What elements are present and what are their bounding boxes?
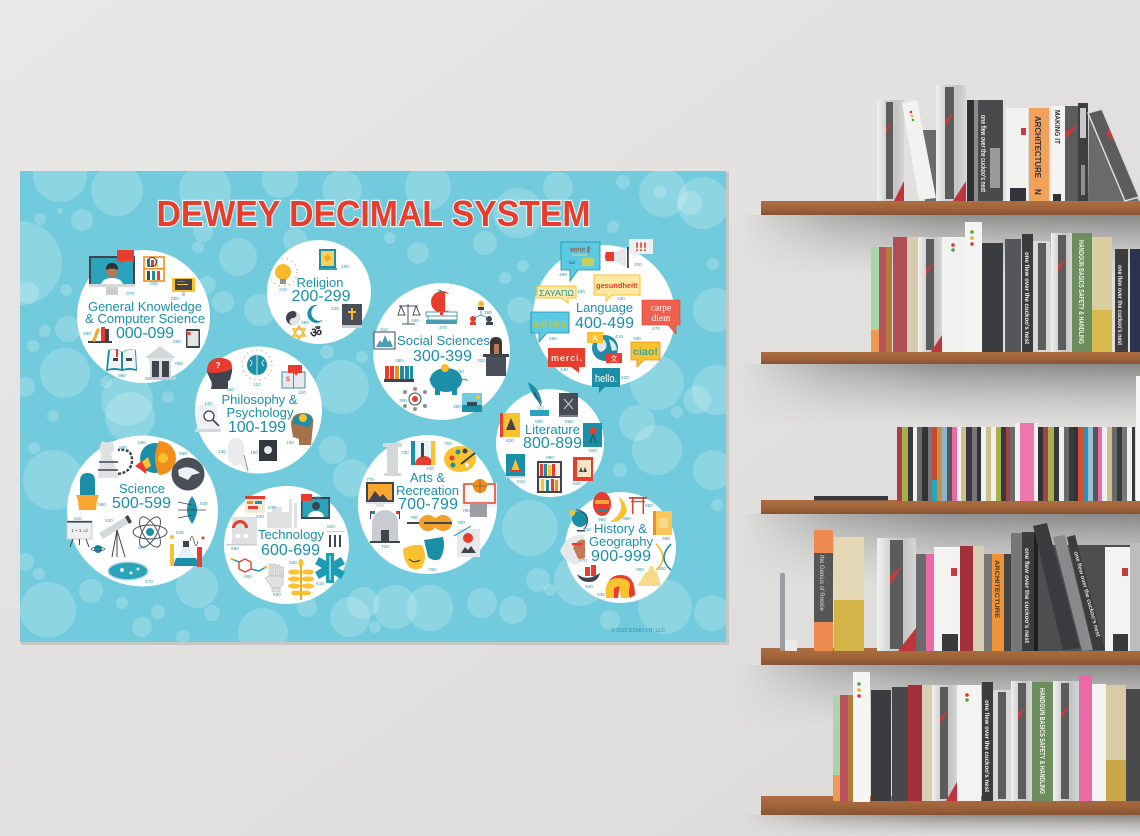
icon: pyramid — [637, 566, 661, 586]
heading: Literature: Literature — [525, 422, 580, 437]
label 450: 450 — [633, 336, 641, 341]
heading: Recreation: Recreation — [396, 483, 459, 498]
circle: Religion — [267, 240, 371, 344]
title: DEWEY DECIMAL SYSTEM — [156, 193, 590, 234]
icon: star of David — [293, 326, 305, 339]
book — [918, 237, 942, 352]
book — [957, 685, 981, 801]
bubble: adios — [531, 312, 569, 342]
label 770: 770 — [366, 477, 374, 482]
label 680: 680 — [231, 546, 239, 551]
book — [1051, 233, 1072, 352]
book — [1065, 106, 1078, 201]
icon: landscape photo — [462, 393, 482, 412]
bubble: carpe diem: carpe — [651, 304, 671, 314]
label 330: 330 — [456, 369, 464, 374]
label 430: 430 — [617, 296, 625, 301]
label 920: 920 — [658, 566, 666, 571]
book — [1053, 681, 1079, 801]
book: Handgun Basics — [1072, 233, 1092, 352]
bubble: adios: adiós — [533, 318, 567, 330]
label 640: 640 — [256, 514, 264, 519]
icon: red book — [573, 457, 593, 481]
circle: Language — [531, 239, 680, 393]
tilted book: cuckoo: one flew over the cuckoo's nest — [1072, 551, 1101, 638]
icon: light bulb — [269, 258, 297, 286]
icon: DNA helix — [656, 544, 671, 570]
label 500: 500 — [138, 545, 146, 550]
label 200: 200 — [341, 264, 349, 269]
book — [1006, 108, 1028, 201]
book: Architecture — [1029, 108, 1049, 201]
icon: yellow book — [500, 413, 520, 437]
label 300: 300 — [399, 398, 407, 403]
shelf 5 with books — [761, 672, 1140, 815]
book — [993, 690, 1011, 801]
book tilted — [1088, 109, 1139, 201]
range 900-999: 900-999 — [591, 548, 651, 565]
icon: library building — [145, 346, 176, 380]
label 390: 390 — [395, 358, 403, 363]
book: Architecture: ARCHITECTURE — [993, 560, 1000, 619]
label 900: 900 — [662, 536, 670, 541]
icon: om symbol: ॐ — [310, 325, 322, 340]
icon: ghost — [228, 438, 248, 471]
bubble: merci — [548, 348, 585, 373]
bubble: ciao — [631, 342, 660, 367]
icon: open book — [106, 349, 137, 371]
book: one flew over the cuckoo's nest: one flew over the cuckoo's nest — [979, 115, 986, 192]
book — [932, 685, 957, 801]
tilted book: cuckoo — [1067, 535, 1105, 650]
label 150: 150 — [226, 387, 234, 392]
bubble: merci: merci. — [551, 353, 582, 363]
book: Architecture: N — [1033, 189, 1042, 195]
bubble: gesundheit: gesundheit! — [596, 283, 638, 290]
tilted book — [1033, 523, 1080, 650]
bubble: ciao: ciao! — [633, 347, 658, 358]
icon: balloon picture — [454, 526, 480, 557]
label 320: 320 — [477, 358, 485, 363]
book: cuckoo: one flew over the cuckoo's nest — [1023, 252, 1030, 345]
book: Handgun Basics: HANDGUN BASICS SAFETY & HANDLING — [1077, 240, 1084, 344]
icon: people network — [470, 301, 493, 325]
icon: headdress — [560, 535, 585, 565]
label 600: 600 — [273, 592, 281, 597]
label 070: 070 — [126, 291, 134, 296]
label 350: 350 — [453, 404, 461, 409]
icon: medical star — [315, 553, 345, 583]
book — [877, 100, 904, 201]
range 600-699: 600-699 — [261, 542, 320, 559]
label 890: 890 — [546, 455, 554, 460]
label 830: 830 — [573, 481, 581, 486]
label 750: 750 — [444, 441, 452, 446]
icon: head with bulb — [291, 413, 313, 445]
icon: Bible — [342, 304, 362, 328]
label 840: 840 — [589, 448, 597, 453]
icon: fossil — [172, 458, 204, 490]
book: cuckoo: one flew over the cuckoo's nest — [983, 700, 990, 793]
icon: earth cross-section — [135, 441, 176, 475]
copyright: © 2022 ECHO-LIT, LLC — [611, 627, 665, 634]
icon: chalkboard — [67, 521, 92, 547]
icon: monitor engineer — [301, 494, 330, 519]
icon: dark book — [559, 393, 578, 417]
label 510: 510 — [74, 516, 82, 521]
icon: golden book — [653, 511, 672, 535]
label 970: 970 — [579, 558, 587, 563]
icon: quill and ink — [528, 382, 549, 416]
label 140: 140 — [204, 401, 212, 406]
label 950: 950 — [645, 503, 653, 508]
icon: wheat — [288, 559, 314, 600]
range 500-599: 500-599 — [112, 495, 171, 512]
shelf 2 with books — [761, 222, 1140, 364]
label 650: 650 — [314, 495, 322, 500]
icon: teal book — [319, 249, 337, 270]
icon: chalkboard: 1 + 1 =2 — [71, 528, 88, 533]
book — [902, 100, 936, 200]
heading: Social Sciences: Social Sciences — [397, 333, 490, 348]
label 860: 860 — [565, 419, 573, 424]
label 570: 570 — [145, 579, 153, 584]
label 220: 220 — [331, 306, 339, 311]
book: cuckoo: one flew over the cuckoo's nest — [1116, 265, 1123, 346]
icon: bars — [384, 366, 414, 382]
circle: General Knowledge & Computer Science — [77, 250, 210, 383]
icon: column — [383, 443, 402, 476]
heading: Language: Language — [576, 300, 633, 315]
icon: planet — [91, 545, 105, 553]
shelf shadows — [740, 215, 1140, 836]
icon: globe with language tags: 文 — [610, 354, 618, 363]
icon: apple on books — [426, 290, 457, 324]
bubble: hello: hello. — [595, 373, 617, 385]
label 000: 000 — [171, 296, 179, 301]
icon: Viking ship — [577, 565, 600, 582]
label 580: 580 — [98, 502, 106, 507]
icon: megaphone — [605, 247, 629, 268]
label 610: 610 — [316, 581, 324, 586]
heading: Religion: Religion — [296, 275, 344, 290]
label 930: 930 — [597, 592, 605, 597]
icon: crescent moon — [307, 305, 323, 323]
heading: Arts &: Arts & — [410, 470, 445, 485]
label 590: 590 — [119, 445, 127, 450]
icon: molecule — [230, 558, 268, 572]
icon: bookcase — [537, 461, 562, 493]
book: cuckoo — [1115, 249, 1128, 352]
bubble: greetings — [561, 242, 600, 281]
label 370: 370 — [439, 325, 447, 330]
label 720: 720 — [381, 544, 389, 549]
icon: lab flask — [170, 535, 204, 567]
book: one flew over the cuckoo's nest — [967, 100, 1003, 201]
icon: chart frame — [374, 332, 395, 349]
tilted book — [1053, 535, 1093, 651]
circle: Social Sciences — [373, 283, 510, 420]
icon: scales — [398, 304, 420, 324]
heading: Technology: Technology — [258, 527, 324, 542]
icon: brain — [242, 350, 272, 380]
book — [1011, 681, 1032, 801]
book — [853, 672, 870, 802]
icon: monitor landscape — [366, 482, 394, 507]
label 460: 460 — [549, 336, 557, 341]
range 800-899: 800-899 — [523, 435, 582, 452]
icon: desk globe — [569, 510, 588, 532]
icon: globe with language tags: A — [592, 334, 598, 343]
range 700-799: 700-799 — [398, 496, 458, 513]
label 790: 790 — [462, 508, 470, 513]
bubble: exclamation: !!! — [635, 240, 647, 254]
label 780: 780 — [410, 515, 418, 520]
label 810: 810 — [517, 479, 525, 484]
label 910: 910 — [583, 527, 591, 532]
icon: arch building — [370, 510, 400, 543]
icon: document with magnifier — [195, 405, 221, 432]
range 300-399: 300-399 — [413, 348, 472, 365]
circle: Philosophy & Psychology — [195, 346, 322, 474]
label 520: 520 — [105, 518, 113, 523]
label 960: 960 — [598, 517, 606, 522]
label 050: 050 — [173, 339, 181, 344]
heading: Philosophy &: Philosophy & — [222, 392, 298, 407]
icon: theatre masks — [403, 537, 444, 570]
shelf 4 with books — [761, 523, 1140, 665]
icon: teal book with candle — [506, 454, 525, 478]
label 490: 490 — [559, 272, 567, 277]
label 800: 800 — [535, 419, 543, 424]
range 200-299: 200-299 — [292, 288, 351, 305]
icon: globe with language tags — [587, 332, 622, 363]
icon: bookshelf magnifier — [144, 257, 164, 281]
icon: speaker at podium — [483, 337, 509, 376]
icon: telescope — [99, 515, 132, 557]
icon: blueprint building — [226, 517, 257, 546]
book — [877, 538, 916, 651]
label 420: 420 — [621, 375, 629, 380]
icon: Spartan helmet — [606, 575, 635, 598]
range 400-499: 400-499 — [575, 315, 634, 332]
label 530: 530 — [200, 501, 208, 506]
label 110: 110 — [253, 382, 261, 387]
book: Making It — [1051, 106, 1065, 201]
icon: lemur — [98, 441, 132, 478]
icon: person network — [403, 387, 427, 411]
book: Making It: MAKING IT — [1053, 110, 1060, 145]
label 020: 020 — [150, 281, 158, 286]
bubble: agape in Greek: ΣΑΥΑΠΩ — [539, 288, 574, 298]
label 550: 550 — [138, 440, 146, 445]
label 730: 730 — [401, 450, 409, 455]
circle: Literature — [496, 382, 604, 497]
label 630: 630 — [289, 560, 297, 565]
label 030: 030 — [83, 331, 91, 336]
book — [934, 547, 960, 651]
icon: robotic glove — [265, 564, 284, 592]
label 990: 990 — [623, 516, 631, 521]
label 100: 100 — [286, 440, 294, 445]
poster — [20, 171, 729, 645]
label 940: 940 — [585, 584, 593, 589]
heading: General Knowledge: General Knowledge — [88, 299, 202, 314]
icon: factory — [267, 499, 297, 528]
label 440: 440 — [560, 367, 568, 372]
heading: Psychology: Psychology — [226, 405, 294, 420]
label 480: 480 — [577, 289, 585, 294]
icon: tribal mask — [593, 492, 611, 516]
circle: Science — [67, 436, 218, 586]
label 660: 660 — [244, 574, 252, 579]
icon: dark book — [259, 440, 277, 461]
book — [1033, 241, 1050, 352]
label 290: 290 — [301, 320, 309, 325]
label 700: 700 — [428, 567, 436, 572]
label 560: 560 — [179, 451, 187, 456]
icon: piggy bank — [429, 364, 467, 395]
book — [936, 85, 966, 201]
bubble: exclamation — [629, 239, 653, 259]
label 340: 340 — [411, 318, 419, 323]
icon: mixer sliders — [327, 531, 345, 547]
label 210: 210 — [279, 287, 287, 292]
icon: open book with speech: S — [286, 377, 290, 383]
label 410: 410 — [615, 334, 623, 339]
label 180: 180 — [250, 450, 258, 455]
book: Architecture — [992, 554, 1004, 651]
icon: books with pencil — [88, 327, 112, 343]
range 100-199: 100-199 — [228, 419, 286, 436]
range 000-099: 000-099 — [116, 325, 174, 342]
icon: monitor person — [89, 250, 135, 295]
book: Architecture: ARCHITECTURE — [1033, 116, 1042, 179]
label 670: 670 — [268, 505, 276, 510]
book — [1078, 103, 1088, 201]
label 740: 740 — [426, 466, 434, 471]
bookend — [780, 573, 785, 651]
shelf 3 with thin books — [761, 376, 1140, 514]
icon: boomerang — [610, 497, 627, 522]
label 120: 120 — [298, 390, 306, 395]
heading: History &: History & — [594, 521, 647, 536]
book: Handgun Basics — [1032, 682, 1053, 801]
bubble: agape in Greek — [537, 286, 576, 303]
icon: amoeba cell — [108, 562, 148, 580]
icon: basketball hoop — [462, 479, 497, 517]
bubble: greetings: स्वागत है — [569, 246, 591, 254]
label 820: 820 — [506, 438, 514, 443]
book: cuckoo — [1022, 234, 1033, 352]
icon: tablet — [186, 329, 200, 348]
circle: Arts & Recreation — [358, 435, 497, 574]
bubble: greetings: أهلا — [568, 259, 576, 266]
label 130: 130 — [218, 449, 226, 454]
shelf 1 with books — [761, 85, 1140, 215]
book: Handgun Basics: HANDGUN BASICS SAFETY & HANDLING — [1038, 688, 1047, 794]
label 080: 080 — [118, 373, 126, 378]
icon: atom — [133, 514, 167, 550]
icon: cactus — [76, 473, 99, 510]
icon: lens — [178, 496, 206, 524]
book: the Genius of Rookie — [818, 555, 824, 612]
label 400: 400 — [634, 262, 642, 267]
label 310: 310 — [380, 327, 388, 332]
label 540: 540 — [176, 530, 184, 535]
circle: History & Geography — [560, 492, 676, 603]
heading: Geography: Geography — [589, 534, 653, 549]
label 620: 620 — [327, 524, 335, 529]
heading: Science: Science — [119, 481, 165, 496]
book: cuckoo — [982, 682, 993, 801]
icon: calendar — [245, 496, 265, 513]
heading: Computer Science: & Computer Science — [85, 311, 205, 326]
book — [814, 530, 833, 651]
label 060: 060 — [175, 361, 183, 366]
label 360: 360 — [484, 310, 492, 315]
icon: violin — [407, 515, 452, 531]
label 760: 760 — [457, 520, 465, 525]
bubble: carpe diem — [642, 300, 680, 334]
bubble: carpe diem: diem — [652, 314, 671, 324]
book: cuckoo — [1022, 532, 1034, 651]
icon: teal book with tower — [583, 423, 602, 447]
icon: head with question mark: ? — [216, 361, 221, 370]
label 980: 980 — [636, 567, 644, 572]
icon: yin yang — [286, 311, 300, 325]
bubble: hello — [592, 368, 620, 393]
circle: Technology — [224, 486, 349, 604]
book: cuckoo: one flew over the cuckoo's nest — [1023, 548, 1030, 644]
icon: art tools — [411, 441, 436, 465]
book — [1105, 547, 1130, 651]
icon: laptop — [172, 278, 195, 296]
label 470: 470 — [652, 326, 660, 331]
icon: palette — [444, 446, 476, 472]
bubble: gesundheit — [594, 275, 640, 301]
icon: torii gate — [629, 497, 647, 514]
